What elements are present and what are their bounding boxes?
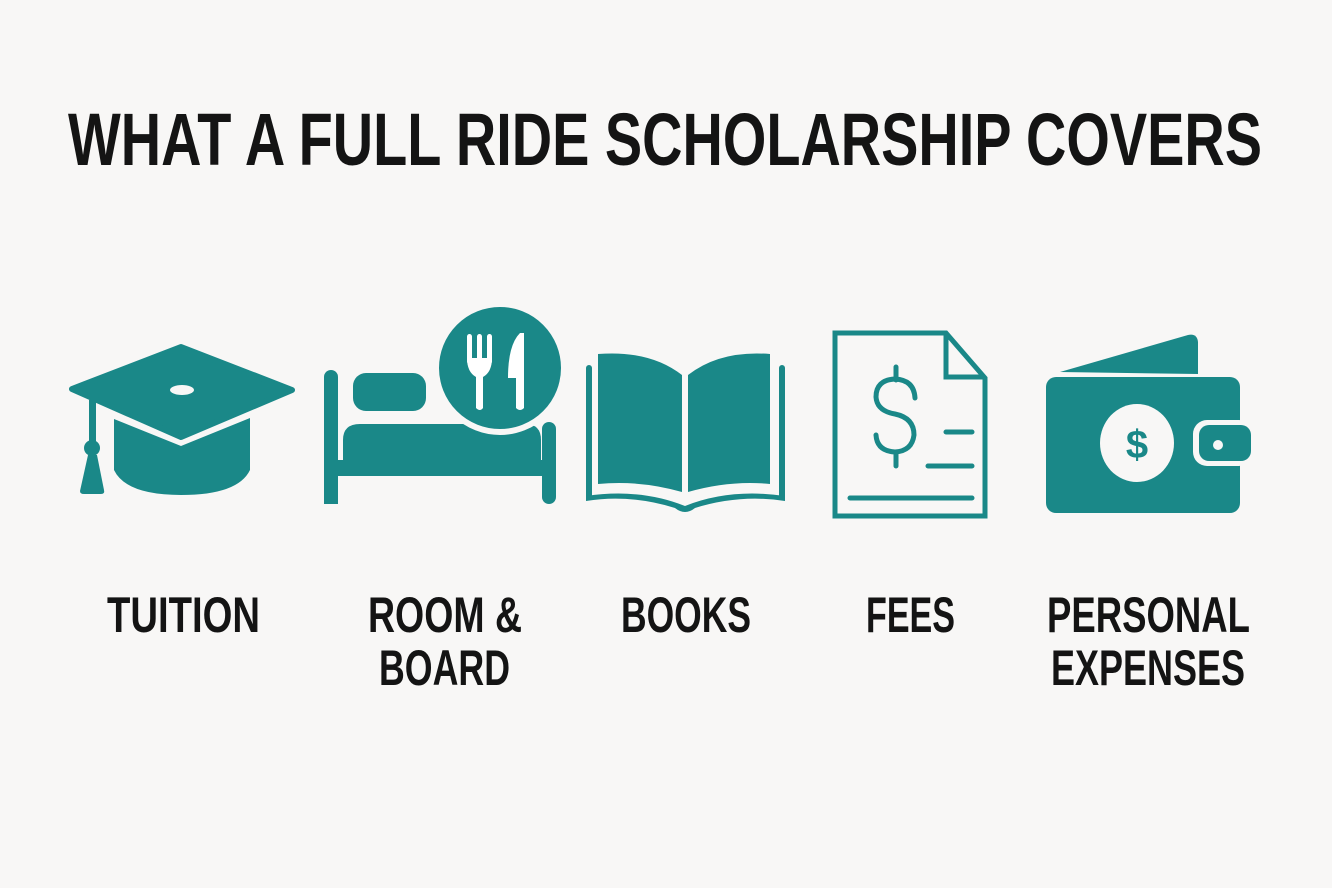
label: room & board [368, 587, 522, 696]
icon: fees document [835, 333, 985, 516]
icon: graduation cap [72, 347, 292, 495]
label: room & board: ROOM & [368, 587, 522, 643]
label: personal expenses: EXPENSES [1051, 640, 1245, 696]
label: room & board: BOARD [379, 640, 510, 696]
icon: wallet [1046, 335, 1253, 513]
icon: bed with meal [324, 304, 564, 504]
fork and knife [467, 333, 524, 410]
labels [107, 587, 1250, 696]
label: personal expenses [1047, 587, 1250, 696]
label: tuition: TUITION [107, 587, 260, 643]
label: books: BOOKS [621, 587, 751, 643]
label: personal expenses: PERSONAL [1047, 587, 1250, 643]
icon: wallet: $ [1126, 423, 1148, 467]
icon: open book [586, 353, 785, 512]
label: fees: FEES [866, 587, 955, 643]
